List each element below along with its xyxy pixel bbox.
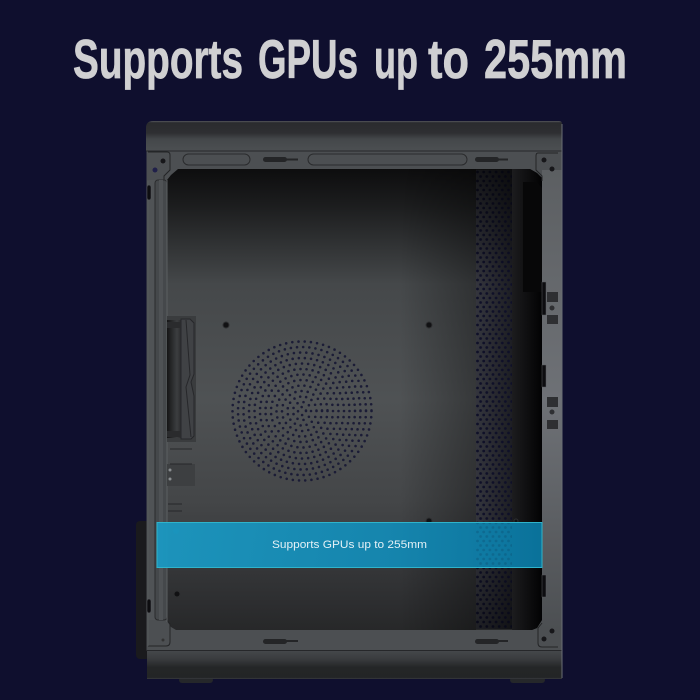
title: 255mm (484, 28, 627, 90)
title: to (428, 28, 469, 90)
right edge highlight (561, 124, 563, 678)
left frame strip (147, 180, 167, 620)
corner brackets (148, 152, 558, 647)
left rail (148, 180, 167, 646)
rear brackets below fan (167, 449, 195, 511)
interior shading toward mesh (400, 169, 476, 630)
band label: Supports GPUs up to 255mm (272, 539, 427, 551)
mesh through band (476, 523, 512, 567)
title: Supports (73, 28, 243, 90)
top slots (183, 154, 508, 165)
rear fan (167, 316, 196, 442)
mesh top and bottom shade (476, 170, 512, 629)
title: GPUs (258, 28, 358, 90)
PC case (136, 121, 562, 683)
corner screws (152, 158, 554, 642)
bottom band (147, 650, 562, 679)
band fill (157, 522, 542, 568)
side clips (147, 185, 546, 613)
perforated side mesh backing (476, 170, 512, 629)
right frame tabs (547, 292, 558, 429)
case feet (179, 677, 545, 683)
perforated side mesh (476, 170, 512, 629)
title (73, 28, 627, 90)
right frame strip (542, 170, 562, 630)
right bracket in interior (523, 182, 542, 292)
title: up (374, 28, 418, 90)
case frame (146, 151, 562, 651)
rear side panel shadow (136, 521, 150, 659)
bottom slots (263, 639, 508, 644)
standoff screws (173, 322, 518, 597)
round perforated vent (232, 342, 372, 480)
top band (146, 121, 562, 151)
GPU clearance band (157, 522, 542, 568)
interior panel (167, 169, 542, 630)
interior right dark area (512, 169, 542, 630)
